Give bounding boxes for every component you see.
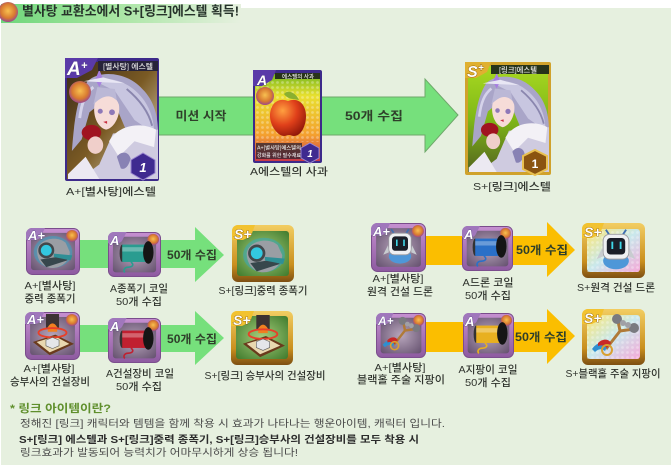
item: A equipment coil: A xyxy=(109,319,119,334)
labels: gambler equipment row: S+[링크] 승부사의 건설장비 xyxy=(204,369,326,382)
labels: gravity bomb row: A종폭기 코일 xyxy=(110,282,168,295)
card: S+ Link Estel: [링크]에스텔 xyxy=(499,64,537,74)
labels: gravity bomb row: 중력 종폭기 xyxy=(24,292,76,305)
labels: gambler equipment row: A+[별사탕] xyxy=(24,362,75,375)
main arrow xyxy=(150,79,458,152)
level badge: 1 xyxy=(307,149,313,160)
item: A staff coil: A xyxy=(464,314,474,329)
card: Estel's apple: 에스텔의 사과 xyxy=(282,72,314,80)
item: S+ drone: S+ xyxy=(584,224,602,240)
item: A bomb coil xyxy=(108,232,161,277)
explanation line 3: 링크효과가 발동되어 능력치가 어마무시하게 상승 됩니다! xyxy=(20,446,298,459)
labels: gambler equipment row xyxy=(10,362,326,393)
card: Estel's apple xyxy=(253,70,322,163)
item: S+ staff: S+ xyxy=(584,310,602,326)
item: A+ gambler equipment: A+ xyxy=(26,312,44,327)
item: A drone coil xyxy=(462,226,513,271)
item: A bomb coil: A xyxy=(109,233,119,248)
labels: staff row: S+블랙홀 주술 지팡이 xyxy=(566,367,660,380)
labels: staff row xyxy=(357,361,660,389)
labels: staff row: 50개 수집 xyxy=(465,376,511,389)
item: A+ staff xyxy=(376,313,426,358)
card: A+ Estel: [별사탕] 에스텔 xyxy=(103,61,153,71)
item: A+ drone: A+ xyxy=(372,224,390,239)
card: Estel's apple: A+[별사탕]에스텔의 xyxy=(257,144,301,152)
card: A+ Estel xyxy=(65,58,159,181)
explanation heading: * 링크 아이템이란? xyxy=(10,402,111,415)
explanation line 2: S+[링크] 에스텔과 S+[링크]중력 종폭기, S+[링크]승부사의 건설장비를 모두 착용 시 xyxy=(19,433,419,446)
card: S+ Link Estel xyxy=(465,62,551,175)
item: S+ gravity bomb: S+ xyxy=(234,226,252,242)
item: A drone coil: A xyxy=(463,227,473,242)
item: A+ gravity bomb: A+ xyxy=(27,228,45,243)
labels: drone row: 50개 수집 xyxy=(465,289,511,302)
labels: drone row: 원격 건설 드론 xyxy=(367,285,433,298)
arrow label: mission start: 미션 시작 xyxy=(176,109,226,123)
item: A+ gambler equipment xyxy=(25,312,79,360)
item: A+ drone xyxy=(371,223,425,271)
labels: drone row: A+[별사탕] xyxy=(372,272,424,285)
labels: gambler equipment row: 승부사의 건설장비 xyxy=(10,376,90,388)
labels: gravity bomb row: A+[별사탕] xyxy=(24,279,76,292)
labels: gravity bomb row: S+[링크]중력 종폭기 xyxy=(218,284,308,297)
arrow: drone row xyxy=(424,222,575,277)
labels: drone row: A드론 코일 xyxy=(462,276,514,289)
labels: staff row: A+[별사탕] xyxy=(374,361,426,374)
item: S+ gambler equipment: S+ xyxy=(233,312,251,328)
label: A+ Estel: A+[별사탕]에스텔 xyxy=(66,185,156,198)
labels: staff row: A지팡이 코일 xyxy=(458,363,518,376)
item: S+ gravity bomb xyxy=(232,225,294,282)
card: A+ Estel: A xyxy=(66,59,81,80)
arrow text: 50개 수집 xyxy=(515,331,567,344)
item: S+ drone xyxy=(582,223,645,278)
arrow text: 50개 수집 xyxy=(516,244,568,257)
item: A equipment coil xyxy=(108,318,161,363)
explanation text block xyxy=(10,402,445,459)
labels: staff row: 블랙홀 주술 지팡이 xyxy=(357,373,445,386)
card: S+ Link Estel: + xyxy=(478,63,484,74)
item: A staff coil xyxy=(463,313,514,358)
labels: gravity bomb row xyxy=(24,279,308,308)
card: S+ Link Estel: S xyxy=(467,64,478,81)
labels: drone row: S+원격 건설 드론 xyxy=(577,281,655,294)
label: Estel's apple: A에스텔의 사과 xyxy=(250,165,328,178)
item: S+ gambler equipment xyxy=(231,311,293,365)
icon: apple xyxy=(270,92,306,136)
arrow: gambler equipment row xyxy=(78,311,224,365)
item: A+ gravity bomb xyxy=(26,228,80,275)
card: Estel's apple: A xyxy=(256,72,267,88)
level badge: 1 xyxy=(139,160,147,175)
label: S+ Link Estel: S+[링크]에스텔 xyxy=(473,180,551,193)
icon: star orb xyxy=(0,2,18,22)
arrow label: collect 50: 50개 수집 xyxy=(345,109,403,123)
explanation line 1: 정해진 [링크] 캐릭터와 템템을 함께 착용 시 효과가 나타나는 행운아이템, 캐릭터 입니다. xyxy=(20,417,445,430)
labels: gambler equipment row: A건설장비 코일 xyxy=(106,367,174,380)
card: Estel's apple: 강화를 위한 필수재료 xyxy=(257,152,301,159)
icon: star orb xyxy=(256,87,274,105)
title banner xyxy=(0,2,241,23)
card: A+ Estel: + xyxy=(81,60,88,72)
title: 별사탕 교환소에서 S+[링크]에스텔 획득! xyxy=(22,4,239,18)
icon: star orb xyxy=(69,81,91,103)
item: S+ staff xyxy=(582,309,645,365)
item: A+ staff: A+ xyxy=(377,314,394,328)
arrow text: 50개 수집 xyxy=(167,333,217,346)
arrow text: 50개 수집 xyxy=(167,249,217,262)
arrow: gravity bomb row xyxy=(78,227,224,282)
labels: gravity bomb row: 50개 수집 xyxy=(116,295,162,308)
labels: gambler equipment row: 50개 수집 xyxy=(116,380,162,393)
level badge: 1 xyxy=(532,157,539,171)
arrow: staff row xyxy=(424,309,575,364)
labels: drone row xyxy=(367,272,655,302)
